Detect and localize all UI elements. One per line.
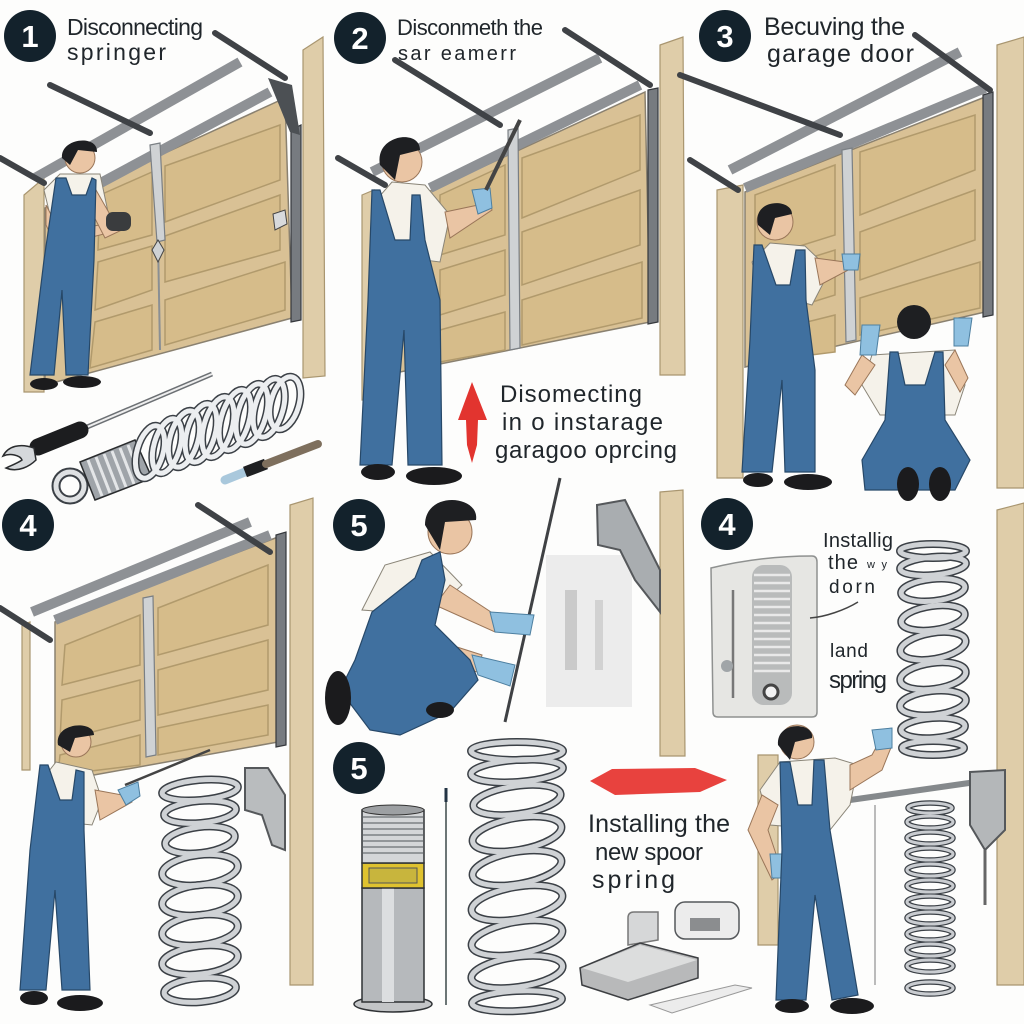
garage door 1	[0, 33, 301, 392]
panel: step 4 left	[0, 498, 313, 1011]
caption: installing the door: land	[830, 641, 868, 662]
step badge 4 right: 4	[718, 507, 736, 542]
caption: installing the door	[823, 530, 893, 694]
heading 3: Becuving the	[764, 13, 905, 41]
caption: installing the new spring	[588, 810, 730, 894]
garage door 4	[0, 505, 286, 782]
panel: step 1 disconnecting the spring	[0, 10, 325, 392]
caption: disconnecting: in o instarage	[502, 409, 663, 436]
step badge 5	[333, 499, 385, 551]
door post 4 right	[997, 503, 1024, 985]
red double arrow	[590, 768, 727, 795]
step badge 4 right	[701, 498, 753, 550]
step badge 4	[2, 499, 54, 551]
door post 4	[290, 498, 313, 985]
panel: step 3 securing the garage door	[680, 10, 1024, 501]
kneeling worker 3	[845, 305, 972, 501]
caption: installing the door: the	[828, 552, 858, 574]
bracket 4	[245, 768, 285, 850]
red up arrow	[458, 382, 487, 463]
step badge 5 lower: 5	[350, 751, 368, 786]
caption: disconnecting: garagoo oprcing	[495, 437, 677, 464]
back wall and rail	[758, 755, 1005, 985]
step badge 3: 3	[716, 19, 734, 54]
door post 3	[997, 37, 1024, 488]
caption: disconnecting	[495, 381, 677, 464]
parts box and small items	[580, 902, 752, 1013]
garage door 3	[680, 35, 993, 478]
door post 2	[660, 37, 685, 375]
standing worker 3	[742, 203, 860, 490]
spring 4	[160, 777, 240, 1005]
heading 2: Disconmeth the	[397, 15, 543, 40]
large spring	[469, 742, 565, 1013]
heading 3: garage door	[767, 40, 914, 68]
coiled spring	[130, 373, 306, 482]
rod	[505, 478, 560, 722]
thin spring	[907, 803, 953, 994]
panel: step 4 right installing	[701, 498, 1024, 985]
cylinder	[354, 788, 446, 1012]
step badge 5: 5	[350, 508, 368, 543]
door post 5	[660, 490, 685, 756]
worker 6	[748, 725, 892, 1014]
caption: installing the new spring: Installing the	[588, 810, 730, 838]
caption: installing the new spring: spring	[592, 866, 675, 894]
wall plate with bracket	[546, 500, 660, 707]
caption: disconnecting: Disomecting	[500, 381, 642, 408]
caption: installing the door: dorn	[829, 577, 875, 598]
caption: installing the door: spring	[829, 667, 887, 694]
heading 2: sar eamerr	[398, 43, 516, 65]
garage door 2	[338, 30, 658, 400]
step badge 4: 4	[19, 508, 37, 543]
spring diagram card	[711, 556, 858, 717]
caption: installing the new spring: new spoor	[595, 839, 703, 866]
eye hook	[56, 472, 84, 500]
panel: step 2 disconnecting the spring	[334, 12, 685, 485]
caption: installing the door: wy	[866, 559, 888, 571]
step badge 1: 1	[21, 19, 39, 54]
kneeling worker 5	[325, 500, 534, 735]
door post 1	[303, 37, 325, 378]
heading 1: springer	[67, 39, 166, 65]
worker 2	[360, 120, 520, 485]
worker 4	[20, 725, 210, 1011]
panel: step 5 kneeling	[325, 478, 685, 756]
step badge 1	[4, 10, 56, 62]
step badge 3	[699, 10, 751, 62]
step badge 2	[334, 12, 386, 64]
panel: step 5 installing the new spring	[333, 742, 752, 1013]
heading 1: Disconnecting	[67, 14, 203, 40]
caption: installing the door: Installig	[823, 530, 893, 552]
spring 4 right	[898, 544, 968, 755]
worker 1	[30, 141, 131, 390]
tools: wrench, spring and screwdriver	[3, 373, 318, 500]
panel: final worker installing spring	[748, 725, 1005, 1014]
heading 2	[397, 15, 543, 65]
heading 1	[67, 14, 203, 65]
step badge 5 lower	[333, 742, 385, 794]
step badge 2: 2	[351, 21, 369, 56]
heading 3	[764, 13, 914, 68]
